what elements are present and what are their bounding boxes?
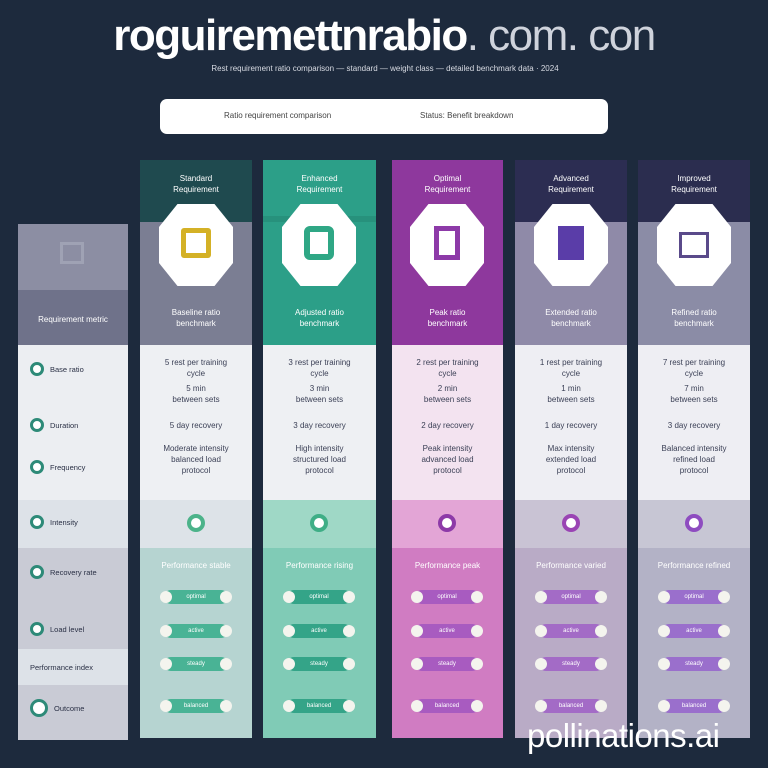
- panel: column 4: between sets: [547, 395, 595, 404]
- panel: label column: Performance index: [30, 663, 93, 672]
- subtitle: Rest requirement ratio comparison — standard — weight class — detailed benchmark data · 2024: [211, 64, 559, 73]
- panel: column 1: 5 min: [186, 384, 206, 393]
- panel: column 5: cycle: [685, 369, 703, 378]
- panel: column 5: Refined ratio: [671, 308, 717, 317]
- panel: column 3: Performance peak: [415, 561, 480, 570]
- panel: column 5: Performance refined: [658, 561, 730, 570]
- panel: column 1: Baseline ratio: [172, 308, 220, 317]
- panel: column 4: optimal: [561, 594, 581, 600]
- panel: label column: Frequency: [50, 463, 85, 472]
- panel: column 3: between sets: [424, 395, 471, 404]
- panel: column 5: optimal: [684, 594, 704, 600]
- panel: column 5: balanced: [682, 703, 706, 709]
- panel: column 4: 1 rest per training: [540, 358, 602, 367]
- panel: column 1: protocol: [182, 466, 210, 475]
- icon: hexagon 2: [282, 204, 356, 286]
- panel: column 5: 7 rest per training: [663, 358, 725, 367]
- panel: label column: [18, 224, 128, 740]
- panel: column 2: between sets: [296, 395, 343, 404]
- panel: column 5: active: [686, 628, 702, 634]
- panel: column 4: cycle: [562, 369, 580, 378]
- panel: column 5: 7 min: [684, 384, 704, 393]
- panel: label column: Intensity: [50, 518, 78, 527]
- panel: column 2: High intensity: [295, 444, 344, 453]
- icon: hexagon 4: [534, 204, 608, 286]
- panel: column 3: Peak ratio: [429, 308, 466, 317]
- icon: label header: [60, 242, 84, 264]
- panel: column 3: balanced: [435, 703, 459, 709]
- panel: column 1: Requirement: [173, 185, 219, 194]
- panel: column 4: 1 min: [561, 384, 581, 393]
- panel: column 3: [392, 160, 503, 738]
- panel: column 1: Standard: [180, 174, 212, 183]
- title: roguiremettnrabio. com. con: [113, 11, 655, 60]
- panel: column 3: Requirement: [425, 185, 470, 194]
- panel: column 2: 3 rest per training: [288, 358, 351, 367]
- panel: column 1: steady: [187, 661, 205, 667]
- panel: column 5: 3 day recovery: [668, 421, 720, 430]
- panel: column 4: extended load: [546, 455, 596, 464]
- search bar: Status: Benefit breakdown: [420, 111, 513, 120]
- panel: column 4: Extended ratio: [545, 308, 597, 317]
- panel: column 4: [515, 160, 627, 738]
- panel: column 1: balanced load: [171, 455, 221, 464]
- panel: column 4: Max intensity: [548, 444, 594, 453]
- panel: column 2: optimal: [309, 594, 329, 600]
- panel: column 3: optimal: [437, 594, 457, 600]
- panel: column 5: [638, 160, 750, 738]
- panel: column 1: [140, 160, 252, 738]
- search bar: Ratio requirement comparison: [224, 111, 331, 120]
- panel: column 3: benchmark: [428, 319, 467, 328]
- panel: column 5: protocol: [680, 466, 708, 475]
- panel: column 3: 2 min: [438, 384, 457, 393]
- panel: column 2: Performance rising: [286, 561, 353, 570]
- panel: column 1: between sets: [172, 395, 220, 404]
- panel: column 3: protocol: [433, 466, 462, 475]
- panel: label column: Base ratio: [50, 365, 84, 374]
- watermark: pollinations.ai: [527, 717, 719, 754]
- panel: column 2: active: [311, 628, 327, 634]
- panel: label column: Load level: [50, 625, 84, 634]
- panel: column 3: cycle: [438, 369, 457, 378]
- panel: column 2: 3 day recovery: [293, 421, 346, 430]
- panel: column 3: active: [439, 628, 455, 634]
- panel: column 3: steady: [438, 661, 456, 667]
- panel: column 1: active: [188, 628, 204, 634]
- panel: column 1: balanced: [184, 703, 208, 709]
- panel: column 3: 2 rest per training: [416, 358, 479, 367]
- panel: column 2: structured load: [293, 455, 346, 464]
- panel: label column: Duration: [50, 421, 78, 430]
- panel: column 4: protocol: [557, 466, 585, 475]
- panel: column 2: steady: [310, 661, 328, 667]
- panel: column 4: Advanced: [553, 174, 589, 183]
- panel: column 4: steady: [562, 661, 580, 667]
- icon: hexagon 3: [410, 204, 484, 286]
- panel: column 1: 5 rest per training: [165, 358, 227, 367]
- panel: column 3: Optimal: [434, 174, 461, 183]
- panel: column 1: Moderate intensity: [163, 444, 229, 453]
- panel: column 1: cycle: [187, 369, 205, 378]
- panel: column 4: Performance varied: [536, 561, 606, 570]
- panel: label column: Requirement metric: [38, 315, 108, 324]
- panel: column 1: Performance stable: [161, 561, 231, 570]
- panel: column 2: Adjusted ratio: [295, 308, 344, 317]
- panel: column 2: Enhanced: [301, 174, 338, 183]
- icon: hexagon 5: [657, 204, 731, 286]
- panel: column 2: 3 min: [310, 384, 329, 393]
- panel: column 1: benchmark: [176, 319, 216, 328]
- panel: column 2: protocol: [305, 466, 334, 475]
- panel: column 2: [263, 160, 376, 738]
- panel: column 4: active: [563, 628, 579, 634]
- panel: column 3: advanced load: [421, 455, 474, 464]
- panel: column 5: Improved: [677, 174, 711, 183]
- panel: column 5: between sets: [670, 395, 718, 404]
- panel: column 5: benchmark: [674, 319, 714, 328]
- panel: column 2: balanced: [307, 703, 331, 709]
- panel: label column: Recovery rate: [50, 568, 97, 577]
- panel: column 1: optimal: [186, 594, 206, 600]
- panel: column 5: steady: [685, 661, 703, 667]
- panel: column 4: Requirement: [548, 185, 594, 194]
- panel: column 4: 1 day recovery: [545, 421, 597, 430]
- search bar: [160, 99, 608, 134]
- panel: column 2: cycle: [310, 369, 329, 378]
- panel: label column: Outcome: [54, 704, 84, 713]
- panel: column 5: refined load: [673, 455, 715, 464]
- panel: column 3: 2 day recovery: [421, 421, 474, 430]
- panel: column 2: benchmark: [300, 319, 339, 328]
- panel: column 1: 5 day recovery: [170, 421, 222, 430]
- panel: column 5: Requirement: [671, 185, 717, 194]
- panel: column 2: Requirement: [297, 185, 342, 194]
- panel: column 4: balanced: [559, 703, 583, 709]
- panel: column 3: Peak intensity: [423, 444, 472, 453]
- panel: column 5: Balanced intensity: [662, 444, 726, 453]
- icon: hexagon 1: [159, 204, 233, 286]
- panel: column 4: benchmark: [551, 319, 591, 328]
